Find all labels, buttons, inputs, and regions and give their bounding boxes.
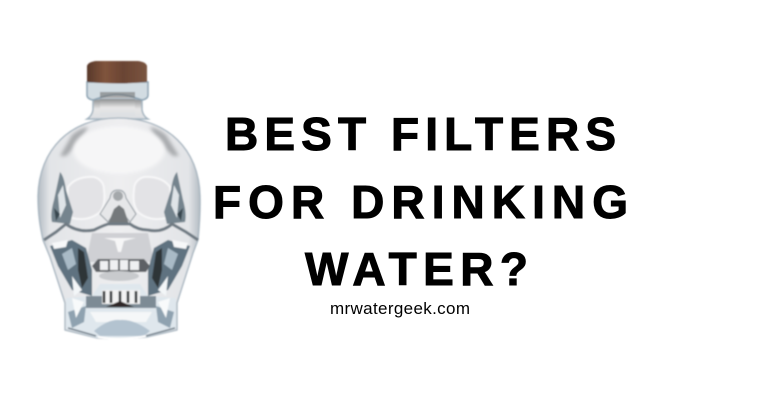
lower jaw (66, 284, 176, 338)
title line 3: WATER? (305, 243, 528, 295)
temple crystal detail (51, 172, 186, 224)
nose bridge (100, 190, 136, 224)
icon: crystal skull bottle (38, 61, 200, 339)
title line 2: FOR DRINKING (213, 176, 628, 228)
brow to cheek ridge (44, 224, 198, 240)
forehead highlight (73, 126, 165, 174)
lower teeth (86, 290, 156, 308)
title (213, 108, 628, 295)
title line 1: BEST FILTERS (225, 108, 616, 160)
skull head (38, 118, 200, 339)
bottle neck (87, 82, 148, 119)
upper teeth (92, 259, 150, 281)
forehead shading (60, 127, 179, 156)
bottle cap (87, 61, 147, 84)
eye sockets (68, 177, 170, 219)
chin facets (68, 298, 175, 339)
website url: mrwatergeek.com (330, 299, 470, 318)
right cheekbone (148, 240, 190, 296)
nose highlight (104, 238, 136, 252)
mid face plate (86, 233, 154, 262)
left cheekbone (50, 240, 92, 296)
